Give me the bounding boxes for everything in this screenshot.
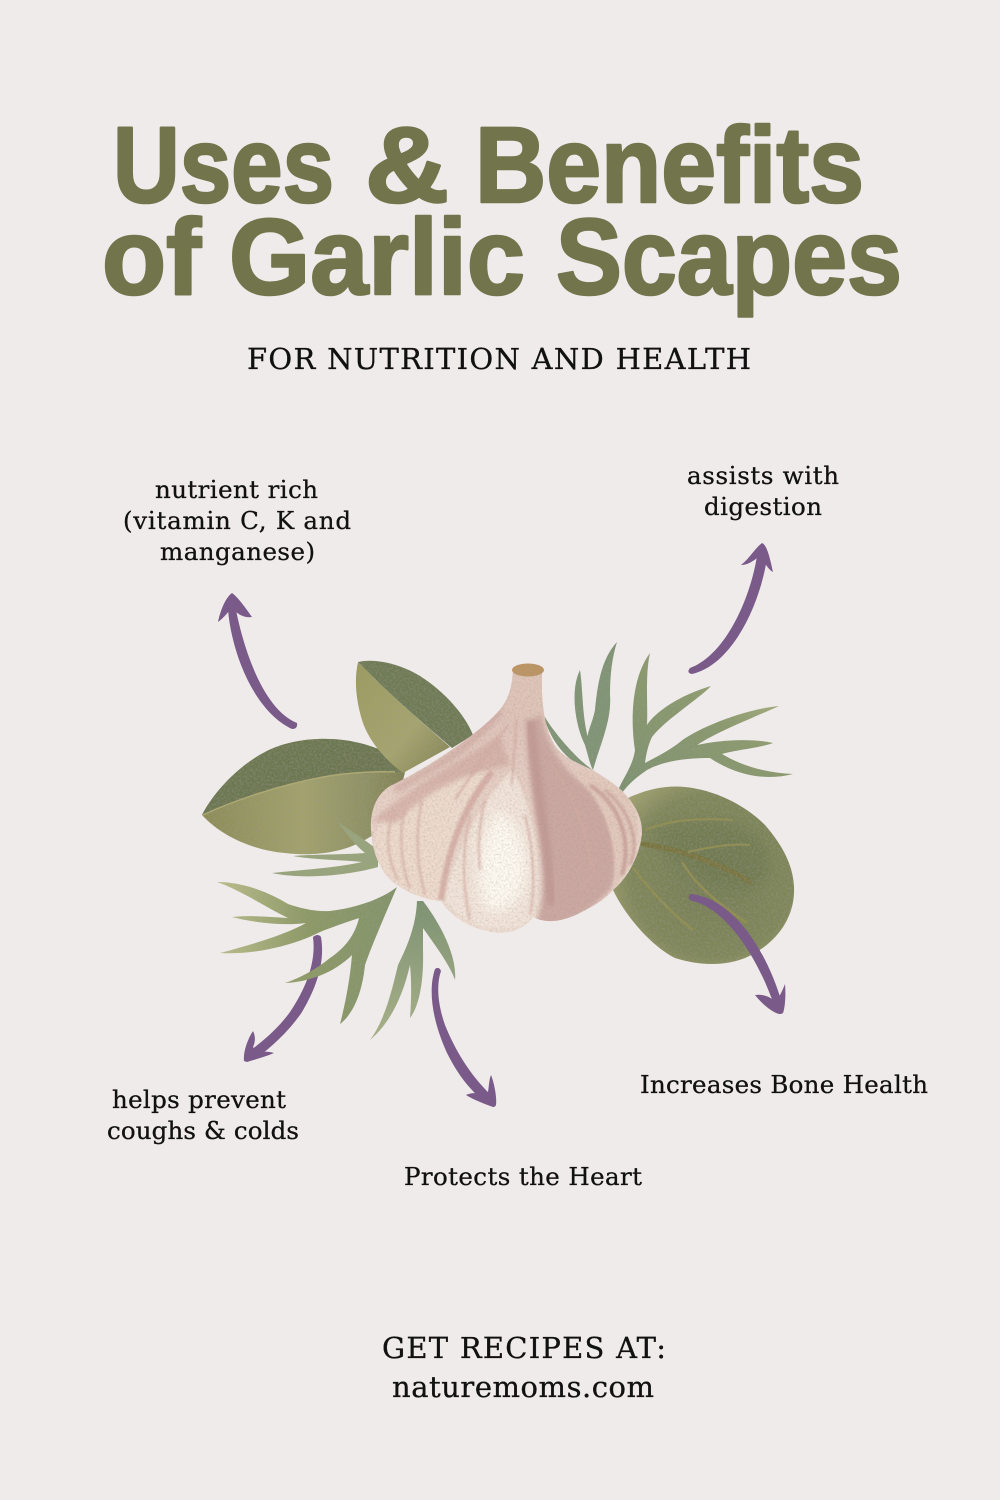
- icon: left large leaf: [202, 739, 405, 854]
- label: helps prevent coughs and colds: helps prevent: [112, 1085, 286, 1114]
- label: assists with digestion: [687, 461, 839, 521]
- label: nutrient rich: (vitamin C, K and: [123, 506, 351, 535]
- arrow: to heart: [432, 968, 496, 1107]
- icon: upper right fern, right sprig: [618, 653, 793, 793]
- footer call to action: GET RECIPES AT:: [382, 1331, 666, 1365]
- icon: upper right fern, left sprig: [543, 642, 617, 770]
- label: protects the heart: Protects the Heart: [404, 1162, 642, 1191]
- title: Scapes: [556, 196, 902, 317]
- icon: upper small leaf: [356, 661, 473, 773]
- label: nutrient rich: [123, 475, 351, 566]
- label: helps prevent coughs and colds: coughs & colds: [107, 1116, 299, 1145]
- title: &: [365, 104, 449, 225]
- title: Uses: [113, 104, 334, 225]
- title: Garlic: [229, 196, 525, 317]
- arrow: to coughs and colds: [244, 935, 322, 1062]
- icon: lower left fern: [217, 882, 397, 1024]
- title: of: [102, 196, 202, 317]
- label: helps prevent coughs and colds: [107, 1085, 299, 1145]
- label: assists with digestion: digestion: [704, 492, 822, 521]
- title: Benefits: [475, 104, 864, 225]
- title: [102, 104, 902, 317]
- arrow: to bone health: [689, 894, 785, 1014]
- label: nutrient rich: nutrient rich: [155, 475, 318, 504]
- footer call to action: naturemoms.com: [392, 1370, 654, 1404]
- icon: small fern under leaf: [272, 822, 378, 876]
- footer call to action: [382, 1331, 666, 1404]
- icon: lower middle fern: [370, 901, 455, 1040]
- icon: garlic bulb: [371, 664, 642, 933]
- illustration: garlic bulb with herbs: [202, 642, 794, 1040]
- subtitle: FOR NUTRITION AND HEALTH: [247, 342, 751, 376]
- label: nutrient rich: manganese): [160, 537, 315, 566]
- label: assists with digestion: assists with: [687, 461, 839, 490]
- icon: right round leaf with veins: [613, 787, 794, 964]
- label: increases bone health: Increases Bone Health: [640, 1070, 928, 1099]
- arrow: to nutrient rich: [218, 593, 297, 729]
- arrow: to digestion: [688, 543, 773, 674]
